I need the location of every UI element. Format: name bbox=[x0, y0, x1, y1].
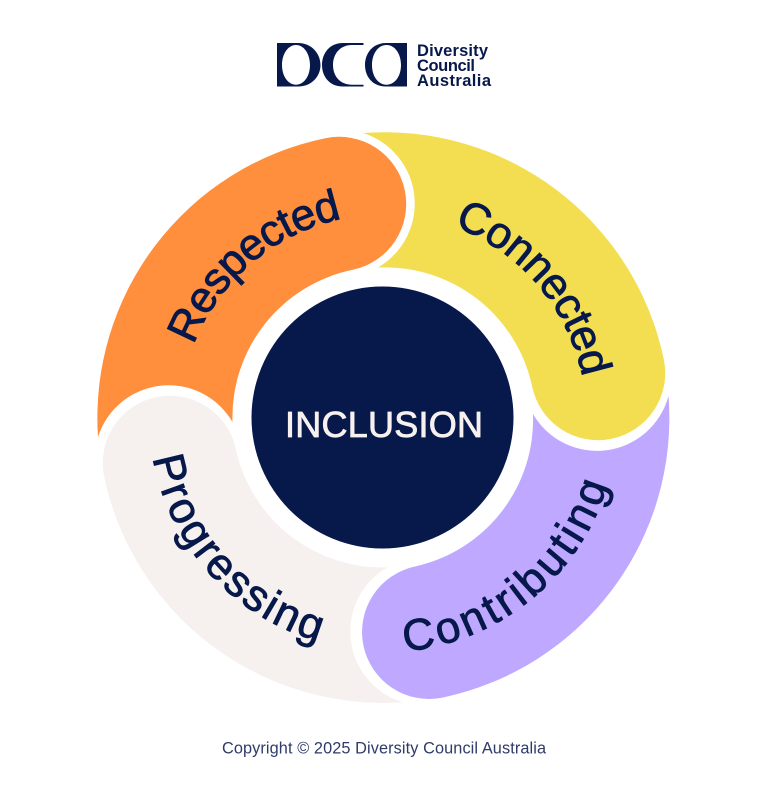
logo mark: DCA letterforms bbox=[277, 43, 407, 86]
centre circle: Inclusion: INCLUSION bbox=[285, 404, 483, 445]
segment: Connected: Connected bbox=[460, 202, 614, 376]
logo wordmark: Council bbox=[417, 57, 475, 75]
segment: Contributing bbox=[362, 396, 670, 699]
segment: Progressing: Progressing bbox=[152, 454, 324, 648]
segment: Respected bbox=[97, 136, 406, 437]
logo wordmark bbox=[417, 42, 492, 90]
centre circle: Inclusion bbox=[252, 286, 514, 548]
logo wordmark: Australia bbox=[417, 72, 492, 90]
segment: Connected bbox=[363, 132, 666, 440]
segment: Contributing: Contributing bbox=[404, 479, 614, 650]
segment: Respected: Respected bbox=[166, 188, 340, 342]
logo wordmark: Diversity bbox=[417, 42, 489, 60]
logo: Diversity Council Australia bbox=[277, 42, 492, 90]
segment: Progressing bbox=[102, 396, 402, 703]
copyright line: Copyright © 2025 Diversity Council Australia bbox=[222, 739, 547, 757]
inclusion wheel bbox=[97, 132, 670, 703]
